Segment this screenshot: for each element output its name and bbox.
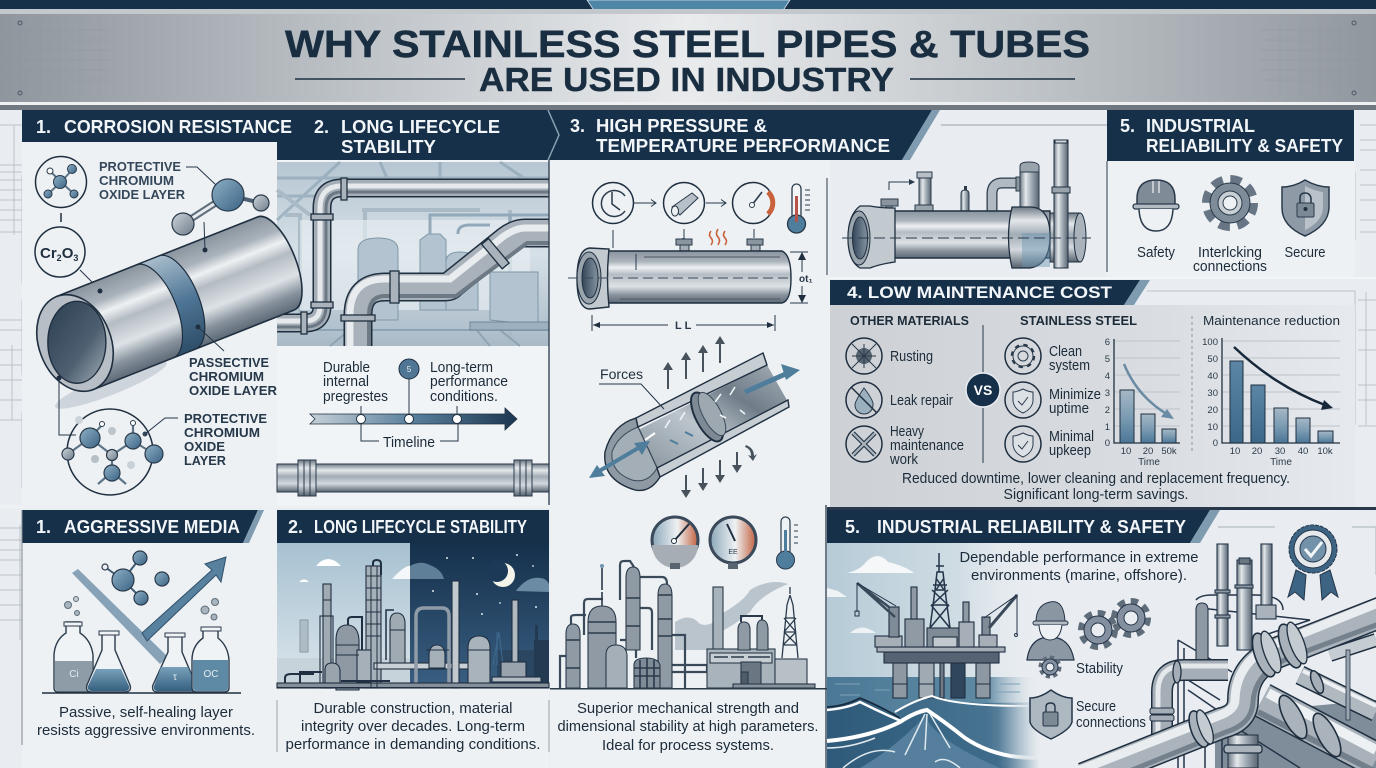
label: passective layer <box>189 356 277 398</box>
text: lifecycle description: performance in demanding conditions. <box>286 736 540 753</box>
pipe: lower right large <box>1258 692 1376 768</box>
heading: industrial reliability: INDUSTRIAL RELIABILITY & SAFETY <box>877 517 1186 537</box>
bar chart: stainless steel maintenance over time: 5 <box>1105 354 1110 365</box>
column heading: stainless steel: STAINLESS STEEL <box>1020 313 1137 328</box>
text: secure connections: connections <box>1076 714 1146 731</box>
icon: molecule <box>102 551 169 605</box>
bar chart: stainless steel maintenance over time: 10 <box>1121 446 1131 457</box>
heading 1: 1. <box>36 117 51 137</box>
text: heavy maintenance work: Heavy <box>890 423 924 440</box>
panel: long lifecycle stability <box>277 160 549 506</box>
pipe dimension markers <box>592 252 813 332</box>
icon: pressure gauges and thermometer <box>652 517 798 569</box>
text: safety: Safety <box>1137 244 1175 261</box>
text: minimal upkeep: upkeep <box>1049 442 1091 459</box>
title text line 1: WHY STAINLESS STEEL PIPES & TUBES <box>285 24 1090 66</box>
text: panel 3 description: Ideal for process systems. <box>602 737 774 754</box>
factory interior scene <box>277 162 549 346</box>
panel: long lifecycle stability lower <box>277 510 549 768</box>
bar chart: maintenance reduction: 0 <box>1213 438 1218 449</box>
bar chart: stainless steel maintenance over time: Time <box>1138 457 1160 468</box>
lower steel pipe <box>341 228 549 346</box>
refinery illustration <box>560 561 815 688</box>
panel: corrosion resistance background <box>22 142 277 506</box>
timeline labels: internal <box>323 373 369 390</box>
divider above lower row <box>0 505 827 508</box>
text: interlocking connections: Interlcking <box>1198 244 1262 261</box>
heading 2: STABILITY <box>341 137 436 157</box>
icon: minimize uptime shield <box>1005 382 1041 418</box>
text: panel 3 description: Superior mechanical strength and <box>577 700 799 717</box>
icon: clean system gear <box>1005 338 1041 374</box>
panel: low maintenance cost <box>830 277 1376 507</box>
text: heavy maintenance work: work <box>889 451 918 468</box>
heading 2: 2. <box>314 117 329 137</box>
text: clean system: Clean <box>1049 343 1082 360</box>
icon: chemical flasks: OC <box>204 669 218 680</box>
text: aggressive media description: resists aggressive environments. <box>37 722 255 739</box>
bar chart: maintenance reduction: 10 <box>1230 446 1240 457</box>
bar chart: stainless steel maintenance over time: 4 <box>1105 371 1110 382</box>
bar chart: stainless steel maintenance over time <box>1105 337 1180 468</box>
text: aggressive media description <box>37 704 255 739</box>
heading 5: RELIABILITY & SAFETY <box>1146 136 1343 156</box>
text: panel 3 description: dimensional stability at high parameters. <box>558 718 818 735</box>
chart title: maintenance reduction: Maintenance reduction <box>1203 313 1340 328</box>
icon: secure shield lower <box>1030 690 1072 739</box>
pipe: lower vertical <box>1224 735 1262 768</box>
label: protective layer bottom: CHROMIUM <box>184 426 260 440</box>
heading 5 <box>1120 116 1343 156</box>
icon: pressure gauges and thermometer: EE <box>728 549 738 556</box>
title banner <box>0 0 1376 110</box>
icon: Cr2O3 circle: 2 <box>57 253 62 263</box>
icon: stability gear <box>1041 658 1059 676</box>
label: protective layer top: CHROMIUM <box>99 174 174 188</box>
heading 5: 5. <box>1120 116 1135 136</box>
icon: thermometer <box>788 184 810 233</box>
VS badge <box>966 373 1000 407</box>
bar chart: maintenance reduction: 100 <box>1202 337 1218 348</box>
label: passective layer: CHROMIUM <box>189 370 264 384</box>
text: leak repair: Leak repair <box>890 392 953 409</box>
text: minimal upkeep <box>1049 428 1094 459</box>
timeline arrow: Timeline <box>383 434 435 451</box>
text: heavy maintenance work: maintenance <box>890 437 964 454</box>
text: minimize uptime <box>1049 386 1101 417</box>
label: protective layer bottom <box>184 412 267 468</box>
arrow: falling and rising V chart <box>72 557 226 664</box>
heading 3: HIGH PRESSURE & <box>596 116 767 136</box>
text: secure connections <box>1076 698 1146 731</box>
text: minimize uptime: uptime <box>1049 400 1089 417</box>
icon: molecule circle <box>36 156 86 208</box>
heading: aggressive media: 1. <box>36 517 51 537</box>
bar chart: maintenance reduction: 40 <box>1207 371 1218 382</box>
text: stability: Stability <box>1076 660 1123 677</box>
pipe: left elbow <box>1150 661 1228 740</box>
bar chart: stainless steel maintenance over time: 1 <box>1105 422 1110 433</box>
bar chart: maintenance reduction: 40 <box>1298 446 1308 457</box>
text: lifecycle description: Durable construction, material <box>314 700 512 717</box>
heading 4: 4. LOW MAINTENANCE COST <box>847 283 1113 302</box>
pipe: main S-curve <box>1080 603 1376 768</box>
label: passective layer: PASSECTIVE <box>189 356 269 370</box>
stainless pipe illustration <box>18 210 317 416</box>
heat waves <box>710 229 726 245</box>
text: dependable performance: Dependable performance in extreme <box>960 549 1198 566</box>
section header band: top row <box>22 110 940 160</box>
text: panel 3 description <box>558 700 818 754</box>
icon: safety helmet <box>1133 180 1179 231</box>
pipe dimension markers: L L <box>675 320 692 332</box>
icon: chemical flasks: Ci <box>69 669 79 680</box>
bar chart: maintenance reduction: 30 <box>1275 446 1285 457</box>
bar chart: maintenance reduction: Time <box>1270 457 1292 468</box>
text: lifecycle description: integrity over decades. Long-term <box>301 718 525 735</box>
label: passective layer: OXIDE LAYER <box>189 384 277 398</box>
icon: minimal upkeep shield <box>1005 426 1041 462</box>
heading 2: LONG LIFECYCLE <box>341 117 500 137</box>
panel: industrial reliability top <box>1107 110 1355 277</box>
bar chart: maintenance reduction: 20 <box>1252 446 1262 457</box>
icon: Cr2O3 circle: Cr <box>40 245 57 262</box>
column heading: other materials: OTHER MATERIALS <box>850 313 969 328</box>
label: protective layer bottom: LAYER <box>184 454 226 468</box>
icon: Cr2O3 circle: O <box>62 245 74 262</box>
text: dependable performance <box>960 549 1198 584</box>
icon: lower molecule circle <box>62 409 178 495</box>
timeline labels: Long-term <box>430 359 493 376</box>
icon: rusting <box>846 338 882 374</box>
icon: interlocking gears <box>1082 602 1147 646</box>
bar chart: maintenance reduction: 10 <box>1207 422 1218 433</box>
heading 3 <box>570 116 890 156</box>
text: aggressive media description: Passive, self-healing layer <box>59 704 233 721</box>
icon: chemical flasks: τ <box>173 672 177 683</box>
bar chart: stainless steel maintenance over time: 6 <box>1105 337 1110 348</box>
text: dependable performance: environments (marine, offshore). <box>971 567 1187 584</box>
heading 2 <box>314 117 500 157</box>
panel: aggressive media <box>22 509 277 768</box>
bar chart: stainless steel maintenance over time: 3 <box>1105 388 1110 399</box>
text: heavy maintenance work <box>889 423 964 468</box>
VS badge: VS <box>974 382 992 398</box>
bar chart: maintenance reduction: 20 <box>1207 405 1218 416</box>
bar chart: stainless steel maintenance over time: 20 <box>1143 446 1153 457</box>
bar chart: maintenance reduction: 10k <box>1317 446 1333 457</box>
timeline arrow <box>310 359 517 451</box>
text: rusting: Rusting <box>890 348 933 365</box>
blueprint side margins <box>0 125 1376 640</box>
icon: Cr2O3 circle <box>35 227 85 277</box>
icon: interlocking gear <box>1208 181 1252 225</box>
heading 1: CORROSION RESISTANCE <box>64 117 292 137</box>
icon: quality badge <box>1288 525 1338 600</box>
icon: Cr2O3 circle: 3 <box>73 253 78 263</box>
bar chart: stainless steel maintenance over time: 2 <box>1105 405 1110 416</box>
title text line 2: ARE USED IN INDUSTRY <box>479 61 894 98</box>
day and night refinery scene <box>277 543 549 690</box>
upper steel pipe <box>277 178 549 334</box>
text: interlocking connections: connections <box>1193 258 1267 275</box>
text: minimize uptime: Minimize <box>1049 386 1101 403</box>
heading: long lifecycle stability: LONG LIFECYCLE STABILITY <box>314 517 527 537</box>
cutaway pipe with forces: Forces <box>600 367 643 382</box>
timeline labels <box>323 359 508 405</box>
offshore oil rig scene <box>827 553 1040 768</box>
icon: secure shield <box>1282 180 1329 236</box>
icon: heavy maintenance <box>846 426 882 462</box>
text: clean system <box>1049 343 1090 374</box>
text: secure: Secure <box>1284 244 1326 261</box>
measured steel pipe <box>568 238 791 309</box>
icon: leak repair <box>846 382 882 418</box>
timeline labels: pregrestes <box>323 388 388 405</box>
icon: upper molecule <box>172 167 269 252</box>
label: protective layer top: OXIDE LAYER <box>99 188 185 202</box>
bar chart: stainless steel maintenance over time: 50k <box>1161 446 1177 457</box>
panel: corrosion resistance content <box>18 156 317 495</box>
steel pipe network <box>1080 544 1376 768</box>
text: interlocking connections <box>1193 244 1267 275</box>
heading 5: INDUSTRIAL <box>1146 116 1255 136</box>
icon: worker <box>1027 602 1074 660</box>
text: minimal upkeep: Minimal <box>1049 428 1094 445</box>
bar chart: maintenance reduction: 50 <box>1207 354 1218 365</box>
ocean waves <box>827 696 1040 768</box>
timeline labels: Durable <box>323 359 370 376</box>
pipe assembly: right of panel 3 <box>842 125 1107 268</box>
pipe: right small <box>1300 640 1376 720</box>
text: maintenance summary: Reduced downtime, lower cleaning and replacement frequency. <box>902 470 1290 487</box>
text: maintenance summary <box>902 470 1290 503</box>
panel: high pressure and temperature performance <box>549 160 830 768</box>
icon: chemical flasks <box>42 596 241 693</box>
text: secure connections: Secure <box>1076 698 1116 715</box>
heading 3: 3. <box>570 116 585 136</box>
panel: industrial reliability lower <box>826 505 1376 768</box>
bar chart: maintenance reduction: 30 <box>1207 388 1218 399</box>
label: protective layer bottom: PROTECTIVE <box>184 412 267 426</box>
pipe dimension markers: ot₁ <box>799 274 813 285</box>
heading 3: TEMPERATURE PERFORMANCE <box>596 136 890 156</box>
label: protective layer bottom: OXIDE <box>184 440 225 454</box>
label: protective layer top: PROTECTIVE <box>99 160 181 174</box>
bar chart: maintenance reduction <box>1202 337 1340 468</box>
text: maintenance summary: Significant long-term savings. <box>1004 486 1188 503</box>
heading: aggressive media: AGGRESSIVE MEDIA <box>64 517 240 537</box>
timeline arrow: 5 <box>407 365 412 374</box>
label: protective layer top <box>99 160 185 202</box>
bar chart: stainless steel maintenance over time: 0 <box>1105 438 1110 449</box>
process icons row <box>592 182 810 233</box>
heading: long lifecycle stability: 2. <box>288 517 303 537</box>
timeline labels: performance <box>430 373 508 390</box>
cutaway pipe with forces <box>589 336 800 498</box>
heading: industrial reliability: 5. <box>845 517 860 537</box>
text: clean system: system <box>1049 357 1090 374</box>
lower straight pipe <box>277 460 549 496</box>
text: lifecycle description <box>286 700 540 753</box>
timeline labels: conditions. <box>430 388 498 405</box>
